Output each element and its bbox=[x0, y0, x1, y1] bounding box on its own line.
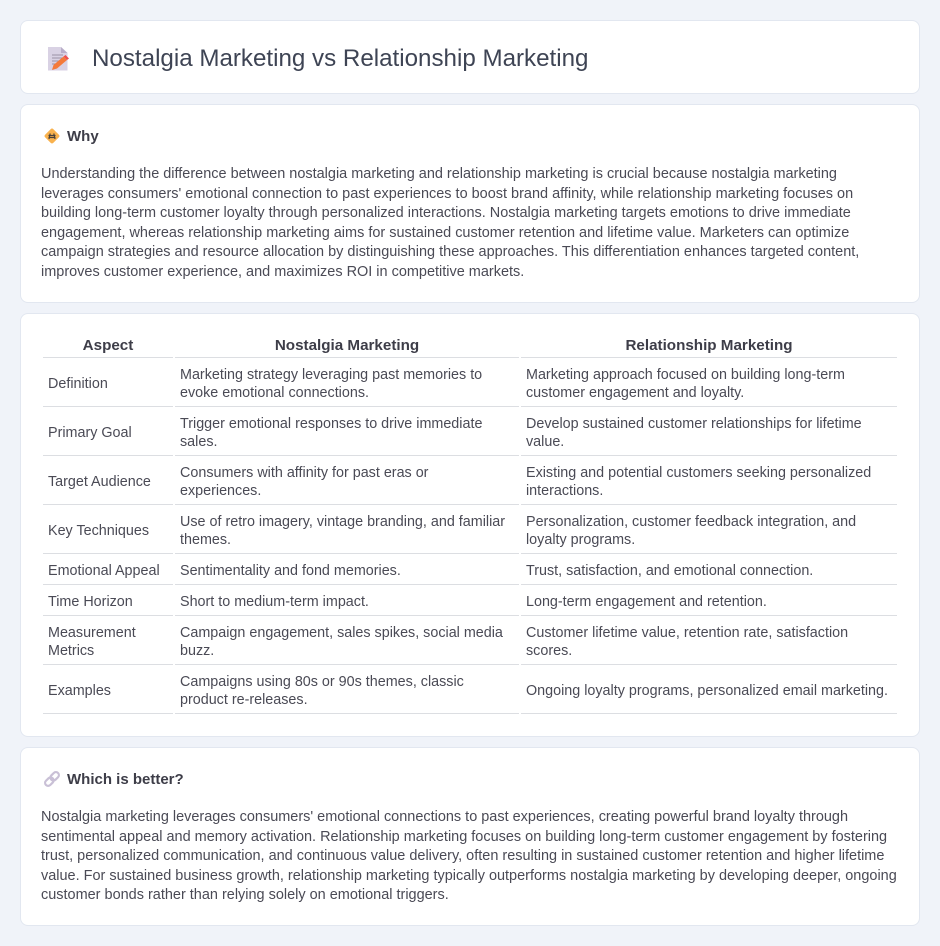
row: primary goal bbox=[43, 416, 897, 456]
title: Nostalgia Marketing vs Relationship Marketing bbox=[92, 45, 588, 72]
icon: warning diamond bbox=[44, 128, 60, 144]
row: measurement metrics: Metrics bbox=[48, 643, 94, 659]
row: target audience bbox=[43, 465, 897, 505]
column heading: relationship marketing: Relationship Marketing bbox=[625, 337, 793, 354]
which is better paragraph: trust, personalized communication, and continuous value delivery, often resulting in sustained customer retention and higher lifetime bbox=[41, 848, 884, 864]
row: primary goal: Trigger emotional responses to drive immediate bbox=[180, 416, 482, 432]
row: primary goal: sales. bbox=[180, 434, 217, 450]
row: emotional appeal: Emotional Appeal bbox=[48, 563, 160, 579]
why paragraph: engagement, whereas relationship marketing aims for sustained customer retention and lifetime value. Marketers can optimize bbox=[41, 224, 849, 240]
why paragraph: improves customer experience, and maximizes ROI in competitive markets. bbox=[41, 264, 524, 280]
row: key techniques: themes. bbox=[180, 532, 231, 548]
why paragraph: Understanding the difference between nostalgia marketing and relationship marketing is crucial because nostalgia marketing bbox=[41, 166, 837, 182]
row: measurement metrics: buzz. bbox=[180, 643, 214, 659]
row: definition: Marketing approach focused on building long-term bbox=[526, 367, 845, 383]
row: examples: product re-releases. bbox=[180, 692, 308, 708]
row: examples bbox=[43, 674, 897, 714]
row: key techniques: Key Techniques bbox=[48, 523, 149, 539]
row: time horizon: Short to medium-term impact. bbox=[180, 594, 369, 610]
row: measurement metrics: Measurement bbox=[48, 625, 136, 641]
row: time horizon bbox=[43, 594, 897, 616]
row: primary goal: value. bbox=[526, 434, 564, 450]
row: key techniques: Use of retro imagery, vintage branding, and familiar bbox=[180, 514, 505, 530]
row: time horizon: Time Horizon bbox=[48, 594, 133, 610]
which is better paragraph: Nostalgia marketing leverages consumers' emotional connections to past experiences, creating powerful brand loyalty through bbox=[41, 809, 848, 825]
column heading: aspect: Aspect bbox=[83, 337, 133, 354]
row: emotional appeal bbox=[43, 563, 897, 585]
row: target audience: Existing and potential customers seeking personalized bbox=[526, 465, 871, 481]
why paragraph: leverages consumers' emotional connection to past experiences to boost brand affinity, while relationship marketing focuses on bbox=[41, 186, 853, 202]
column heading: nostalgia marketing: Nostalgia Marketing bbox=[275, 337, 419, 354]
icon: memo and pencil bbox=[48, 47, 69, 70]
which is better paragraph: customer bonds rather than relying solely on emotional triggers. bbox=[41, 887, 449, 903]
row: definition: Marketing strategy leveraging past memories to bbox=[180, 367, 482, 383]
heading: why: Why bbox=[67, 128, 99, 145]
panel: comparison table bbox=[20, 313, 920, 737]
panel: why bbox=[20, 104, 920, 303]
row: measurement metrics: Customer lifetime value, retention rate, satisfaction bbox=[526, 625, 848, 641]
header panel bbox=[20, 20, 920, 94]
row: primary goal: Primary Goal bbox=[48, 425, 132, 441]
why paragraph: campaign strategies and resource allocation by distinguishing these approaches. This differentiation enhances targeted content, bbox=[41, 244, 859, 260]
row: measurement metrics: Campaign engagement, sales spikes, social media bbox=[180, 625, 503, 641]
row: examples: Campaigns using 80s or 90s themes, classic bbox=[180, 674, 464, 690]
row: target audience: interactions. bbox=[526, 483, 603, 499]
row: examples: Ongoing loyalty programs, personalized email marketing. bbox=[526, 683, 888, 699]
row: definition: customer engagement and loyalty. bbox=[526, 385, 744, 401]
row: definition: Definition bbox=[48, 376, 108, 392]
row: measurement metrics bbox=[43, 625, 897, 665]
row: key techniques: loyalty programs. bbox=[526, 532, 635, 548]
icon: link bbox=[44, 771, 60, 787]
row: key techniques bbox=[43, 514, 897, 554]
row: emotional appeal: Sentimentality and fond memories. bbox=[180, 563, 401, 579]
why paragraph: building long-term customer loyalty through personalized interactions. Nostalgia marketing targets emotions to drive immediate bbox=[41, 205, 851, 221]
which is better paragraph bbox=[41, 809, 897, 903]
table header row bbox=[43, 337, 897, 358]
row: time horizon: Long-term engagement and retention. bbox=[526, 594, 767, 610]
row: target audience: experiences. bbox=[180, 483, 261, 499]
row: definition bbox=[43, 367, 897, 407]
row: examples: Examples bbox=[48, 683, 111, 699]
row: primary goal: Develop sustained customer relationships for lifetime bbox=[526, 416, 862, 432]
why paragraph bbox=[41, 166, 859, 280]
row: measurement metrics: scores. bbox=[526, 643, 572, 659]
row: target audience: Target Audience bbox=[48, 474, 151, 490]
which is better paragraph: sentimental appeal and memory activation. Relationship marketing focuses on building long-term customer engagement by fostering bbox=[41, 828, 887, 844]
row: definition: evoke emotional connections. bbox=[180, 385, 369, 401]
row: target audience: Consumers with affinity for past eras or bbox=[180, 465, 428, 481]
row: key techniques: Personalization, customer feedback integration, and bbox=[526, 514, 856, 530]
which is better paragraph: value. For sustained business growth, relationship marketing typically outperforms nostalgia marketing by developing deeper, ongoing bbox=[41, 868, 897, 884]
heading: which is better: Which is better? bbox=[67, 771, 184, 788]
panel: which is better bbox=[20, 747, 920, 926]
row: emotional appeal: Trust, satisfaction, and emotional connection. bbox=[526, 563, 813, 579]
